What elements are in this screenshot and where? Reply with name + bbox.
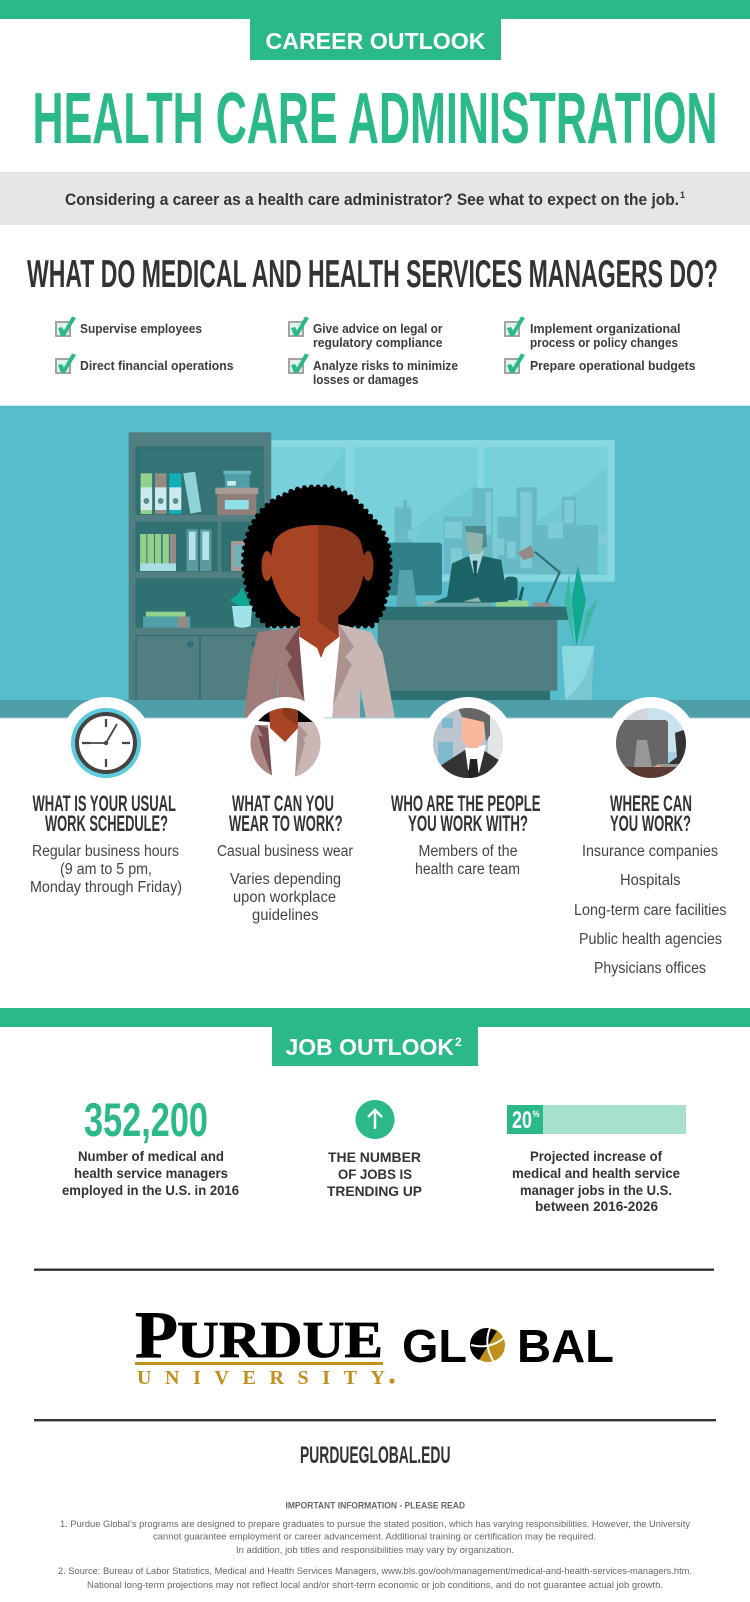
column: workplaces: Hospitals (620, 872, 681, 889)
stat: trending up: OF JOBS IS (338, 1166, 412, 1182)
Purdue Global logo (135, 1298, 614, 1389)
column: work wear: upon workplace (233, 889, 336, 906)
tab: job outlook: 2 (455, 1035, 462, 1049)
potted plant (560, 565, 598, 700)
duty: analyze risks (289, 354, 458, 387)
office background (0, 406, 750, 718)
duty: implement changes: Implement organizational (530, 321, 680, 336)
floor edge (0, 718, 750, 719)
column: workplaces: Public health agencies (579, 931, 722, 948)
disclaimer: cannot guarantee employment or career advancement. Additional training or certification may be required. (153, 1532, 596, 1542)
blazer and shirt (244, 624, 395, 718)
column: work schedule: WHAT IS YOUR USUAL (32, 791, 176, 816)
column: work schedule: Regular business hours (32, 843, 179, 860)
stat: 20 percent: % (532, 1109, 540, 1119)
stat: 352,200 managers: health service managers (74, 1165, 228, 1181)
disclaimer: National long-term projections may not reflect local and/or short-term economic or job conditions, and do not guarantee actual job growth. (87, 1580, 663, 1591)
column: workplaces (574, 791, 727, 977)
duty: direct financial operations (56, 354, 234, 373)
column: workplaces: Insurance companies (582, 843, 718, 860)
job outlook bar (0, 1008, 750, 1027)
website: PURDUEGLOBAL.EDU (300, 1442, 450, 1469)
stat: 352,200 managers: 352,200 (84, 1093, 208, 1146)
duty: implement changes: process or policy changes (530, 335, 678, 350)
stat: 352,200 managers: Number of medical and (78, 1148, 224, 1164)
stat: 20 percent (507, 1105, 686, 1214)
column: people: health care team (415, 861, 520, 878)
stat: 20 percent: 20 (512, 1107, 532, 1134)
desk (378, 587, 572, 700)
icon: colleague (433, 708, 503, 778)
duty: legal advice: regulatory compliance (313, 335, 442, 350)
column: work schedule: Monday through Friday) (30, 879, 182, 896)
Purdue Global logo: URDUE (177, 1312, 383, 1369)
column: work schedule: (9 am to 5 pm, (60, 861, 152, 878)
duty: prepare budgets: Prepare operational budgets (530, 358, 696, 373)
column: workplaces: YOU WORK? (610, 811, 691, 836)
column: workplaces: WHERE CAN (610, 791, 692, 816)
column: people: WHO ARE THE PEOPLE (391, 791, 540, 816)
icon: workplace (616, 708, 686, 779)
intro band (0, 172, 750, 225)
column: work wear: guidelines (252, 907, 319, 924)
Purdue Global logo: P (135, 1298, 178, 1372)
column: people: YOU WORK WITH? (408, 811, 528, 836)
stat: 20 percent: manager jobs in the U.S. (520, 1182, 672, 1198)
stat: trending up: THE NUMBER (328, 1149, 421, 1165)
disclaimer: In addition, job titles and responsibilities may vary by organization. (236, 1545, 514, 1556)
column: work wear: WHAT CAN YOU (232, 791, 334, 816)
office illustration (0, 406, 750, 718)
duty: analyze risks: Analyze risks to minimize (313, 358, 458, 373)
tab: job outlook (272, 1027, 478, 1066)
Purdue Global logo: BAL (517, 1320, 614, 1372)
tab: job outlook: JOB OUTLOOK (286, 1034, 454, 1060)
top green bar (0, 0, 750, 19)
tab: career outlook: CAREER OUTLOOK (266, 28, 486, 54)
man at desk (421, 526, 518, 607)
duty: legal advice (289, 316, 442, 350)
stat: 352,200 managers: employed in the U.S. in 2016 (62, 1182, 239, 1198)
desk lamp (518, 545, 560, 603)
stat: trending up (327, 1100, 422, 1199)
disclaimer: 2. Source: Bureau of Labor Statistics, Medical and Health Services Managers, www.bls.gov/ooh/management/medical-and-health-services-managers.htm. (58, 1566, 692, 1577)
stat: 352,200 managers (62, 1093, 239, 1198)
duty: supervise employees (56, 316, 202, 336)
column: work wear: WEAR TO WORK? (229, 811, 342, 836)
icon: business wear (250, 707, 321, 779)
icon: globe (470, 1328, 505, 1362)
disclaimer: IMPORTANT INFORMATION - PLEASE READ (286, 1500, 465, 1512)
icon halos (60, 697, 697, 789)
intro band: 1 (680, 190, 685, 200)
duty: prepare budgets (505, 354, 696, 373)
duty: analyze risks: losses or damages (313, 372, 418, 387)
disclaimer (58, 1500, 692, 1591)
checklist of duties (56, 316, 696, 387)
column: work wear: Varies depending (230, 871, 341, 888)
icon: clock (71, 708, 141, 778)
stat: 20 percent: medical and health service (512, 1165, 680, 1181)
column: work wear: Casual business wear (217, 843, 353, 860)
column: work schedule: WORK SCHEDULE? (45, 811, 168, 836)
stat: 20 percent: Projected increase of (530, 1148, 662, 1164)
duty: supervise employees: Supervise employees (80, 321, 202, 336)
intro band: Considering a career as a health care administrator? See what to expect on the job. (65, 190, 679, 209)
bookshelf (129, 432, 271, 700)
tab: career outlook (250, 19, 501, 60)
Purdue Global logo: GL (402, 1320, 467, 1372)
woman with curly hair (243, 487, 395, 718)
column: workplaces: Physicians offices (594, 960, 706, 977)
monitor (383, 543, 442, 607)
Purdue Global logo: UNIVERSITY (137, 1367, 386, 1389)
stat: 20 percent: between 2016-2026 (535, 1198, 658, 1214)
column: work schedule (30, 791, 182, 896)
column: people: Members of the (418, 843, 518, 860)
column: people (391, 791, 540, 878)
duty: direct financial operations: Direct financial operations (80, 358, 234, 373)
duty: legal advice: Give advice on legal or (313, 321, 442, 336)
disclaimer: 1. Purdue Global’s programs are designed to prepare graduates to pursue the stated position, which has varying responsibilities. However, the University (60, 1519, 690, 1530)
duty: implement changes (505, 316, 680, 350)
column: workplaces: Long-term care facilities (574, 902, 727, 919)
column: work wear (217, 791, 353, 924)
stat: trending up: TRENDING UP (327, 1183, 422, 1199)
